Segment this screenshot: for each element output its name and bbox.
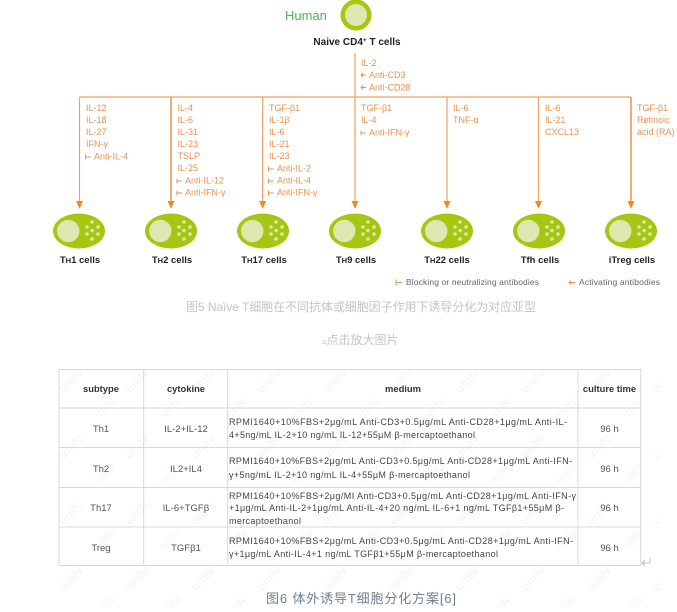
row: Th2: IL2+IL4 [170,464,202,475]
cytokines: Th17 [268,103,318,198]
cytokines: Th2 [177,103,226,198]
initial stimuli list: Anti-CD3 [369,70,406,80]
row: Th17: +1μg/mL Anti-IL-2+1μg/mL Anti-IL-4+20 ng/mL IL-6+1 ng/mL TGFβ1+55μM β- [229,503,564,513]
row: Th17: 96 h [600,503,619,514]
row: Th2: RPMI1640+10%FBS+2μg/mL Anti-CD3+0.5μg/mL Anti-CD28+1μg/mL Anti-IFN- [229,456,572,466]
cytokines: Th17: IL-1β [269,115,290,125]
table header: culture time [583,383,636,394]
cytokines: Th2: IL-31 [178,127,198,137]
cell: Th22: TH22 cells [424,255,470,266]
legend: blocking antibodies: Blocking or neutralizing antibodies [406,277,539,287]
cell: Tfh [513,214,565,266]
row: Th2: Th2 [93,464,109,475]
arrows: branch tree [76,53,634,209]
row: Th2: 96 h [600,464,619,475]
cell: Th17: TH17 cells [241,255,287,266]
cytokines: iTreg: Retinoic [637,115,670,125]
row: Treg [91,536,619,559]
cytokines: Tfh [545,103,579,137]
cytokines: iTreg: acid (RA) [637,127,675,137]
icon: naive T cell [340,0,372,30]
cell: Th2: TH2 cells [152,255,192,266]
cytokines: Th2: Anti-IL-12 [185,176,224,186]
cell: Th1 [53,214,105,266]
cytokines: Th1: IL-27 [86,127,107,137]
row: Th1: 96 h [600,424,619,435]
cell: Th2 [145,214,197,266]
cytokines: Tfh: IL-6 [545,103,561,113]
cytokines: Th17: Anti-IL-2 [277,164,311,174]
cytokines: Tfh: CXCL13 [545,127,579,137]
row: Th1: RPMI1640+10%FBS+2μg/mL Anti-CD3+0.5μg/mL Anti-CD28+1μg/mL Anti-IL- [229,417,567,427]
cytokines: Th17: IL-6 [269,127,285,137]
cell: Tfh: Tfh cells [521,255,559,266]
icon: return mark [642,558,650,566]
cytokines: Th2: IL-23 [178,139,198,149]
row: Th17: RPMI1640+10%FBS+2μg/MI Anti-CD3+0.5μg/mL Anti-CD28+1μg/mL Anti-IFN-γ [229,491,576,501]
row: Th17: Th17 [90,503,112,514]
row: Th1: 4+5ng/mL IL-2+10 ng/mL IL-12+55μM β-mercaptoethanol [229,430,475,440]
cytokines: Th9: TGF-β1 [361,103,392,113]
cell: iTreg [605,214,657,266]
cytokines: iTreg [637,103,675,137]
watermark background [50,350,660,608]
cytokines: Th22: TNF-α [453,115,479,125]
row: Treg: 96 h [600,543,619,554]
cytokines: Th2: IL-6 [178,115,193,125]
table header: cytokine [167,383,205,394]
cell: iTreg: iTreg cells [609,255,655,266]
cytokines: Th2: Anti-IFN-γ [185,188,226,198]
row: Th1: IL-2+IL-12 [164,424,208,435]
table header: subtype [83,383,119,394]
legend: activating antibodies: Activating antibodies [579,277,660,287]
label: naive CD4+ T cells: Naive CD4 [313,37,363,48]
cytokines: Th22: IL-6 [453,103,469,113]
table grid [59,369,641,566]
cytokines: Th9: Anti-IFN-γ [369,128,410,138]
cytokines: Th1: IFN-γ [86,139,108,149]
cytokines: Th9 [361,103,410,138]
cytokines: Th17: TGF-β1 [269,103,300,113]
cell: Th22 [421,214,473,266]
table header: medium [385,383,421,394]
cytokines: Tfh: IL-21 [545,115,566,125]
cytokines: Th2: TSLP [178,151,200,161]
row: Th17 [90,491,619,526]
initial stimuli list: Anti-CD28 [369,82,411,92]
label: naive CD4+ T cells: T cells [367,37,401,48]
cell: Th9: TH9 cells [336,255,376,266]
row: Treg: RPMI1640+10%FBS+2μg/mL Anti-CD3+0.5μg/mL Anti-CD28+1μg/mL Anti-IFN- [229,536,573,546]
row: Treg: TGFβ1 [171,543,201,554]
caption: figure 5: 图5 Naïve T细胞在不同抗体或细胞因子作用下诱导分化为对应亚型 [186,299,536,314]
cytokines: Th2: IL-25 [178,163,198,173]
row: Th1: Th1 [93,424,109,435]
link: enlarge image: ▵点击放大图片 [322,332,399,347]
row: Treg: γ+1μg/mL Anti-IL-4+1 ng/mL TGFβ1+55μM β-mercaptoethanol [229,549,498,559]
cytokines: Th2: IL-4 [178,103,193,113]
table [59,369,641,566]
cytokines: Th9: IL-4 [361,115,377,125]
row: Th1 [93,417,619,440]
cell: Th1: TH1 cells [60,255,100,266]
cytokines: Th17: IL-21 [269,139,290,149]
initial stimuli list [361,58,411,92]
initial stimuli list: IL-2 [361,58,377,68]
cytokines: Th1: IL-12 [86,103,107,113]
cytokines: Th17: Anti-IFN-γ [277,188,318,198]
cytokines: Th1 [86,103,128,162]
cell: Th17 [237,214,289,266]
row: Th17: mercaptoethanol [229,516,301,526]
cytokines: Th22 [453,103,479,125]
heading: Human: Human [285,8,327,23]
cytokines: Th17: IL-23 [269,151,290,161]
row: Th2: γ+5ng/mL IL-2+10 ng/mL IL-4+55μM β-mercaptoethanol [229,470,470,480]
cytokines: iTreg: TGF-β1 [637,103,668,113]
cell: Th9 [329,214,381,266]
row: Treg: Treg [91,543,111,554]
row: Th17: IL-6+TGFβ [163,503,210,514]
cytokines: Th1: IL-18 [86,115,107,125]
table header [83,383,636,394]
row: Th2 [93,456,619,480]
caption: figure 6: 图6 体外诱导T细胞分化方案[6] [266,591,456,606]
cytokines: Th17: Anti-IL-4 [277,176,311,186]
cytokines: Th1: Anti-IL-4 [94,152,128,162]
label: naive CD4+ T cells: + [363,37,367,44]
